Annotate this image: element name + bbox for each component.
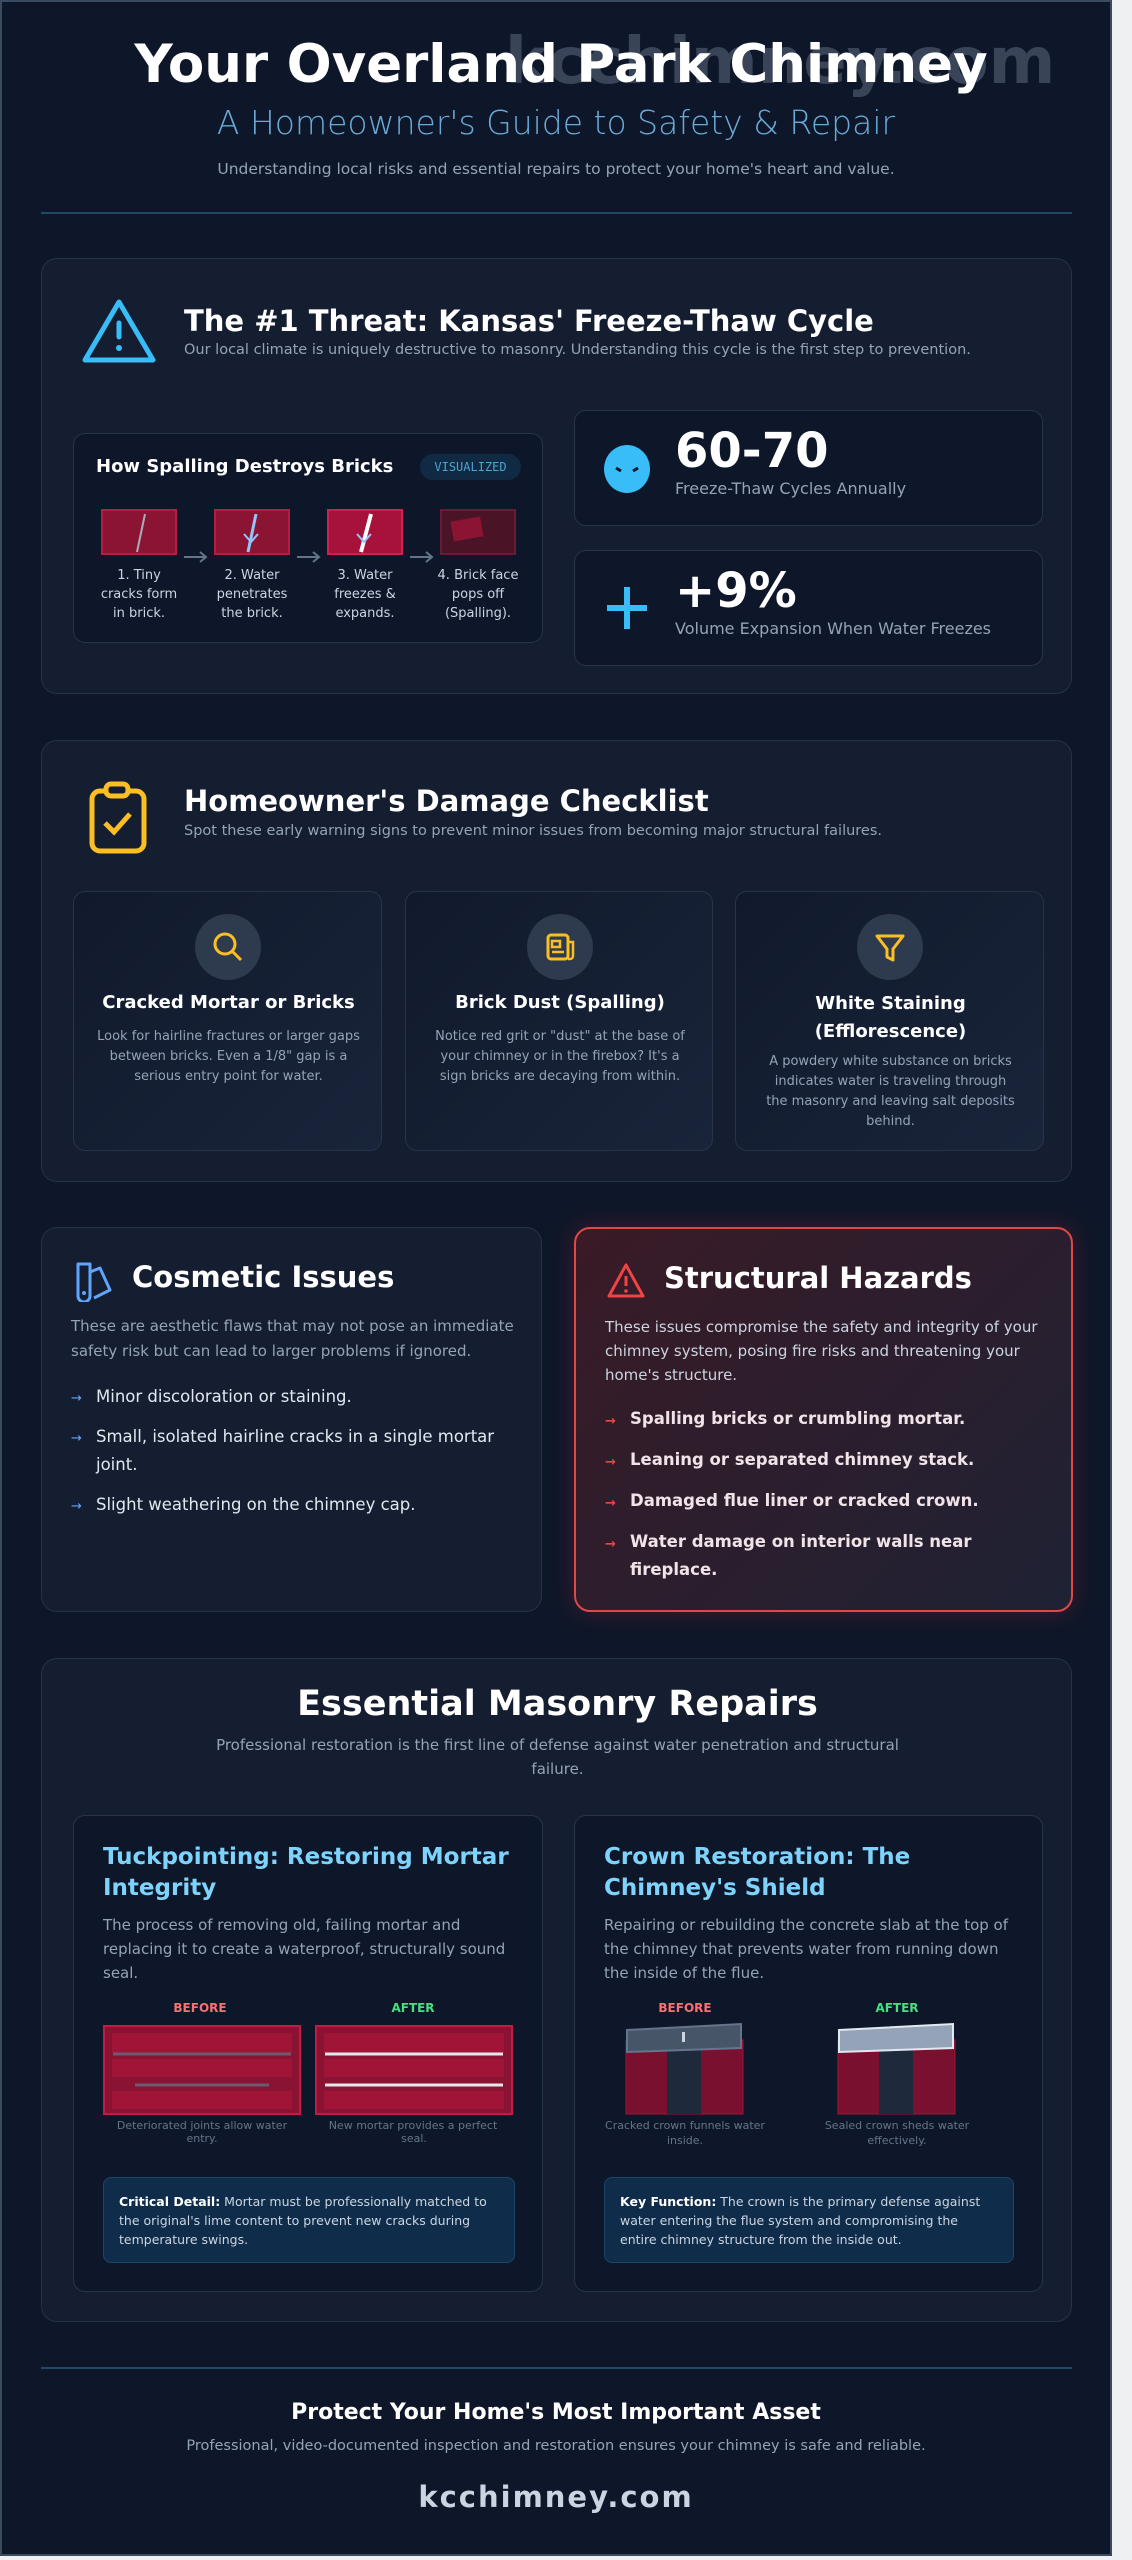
stat: expansion: +9% xyxy=(675,563,797,619)
list: → xyxy=(605,1496,616,1511)
card: crown: Repairing or rebuilding the concrete slab at the top of the chimney that prevents water from running down the inside of the flue. xyxy=(604,1916,1008,1982)
stat: cycles: 60-70 xyxy=(675,423,829,479)
list: Spalling bricks or crumbling mortar. xyxy=(630,1409,965,1428)
heading: The #1 Threat: Kansas' Freeze-Thaw Cycle xyxy=(184,304,874,338)
bricks diagram: penetrates xyxy=(217,587,288,602)
panel: essential repairs xyxy=(41,1658,1072,2322)
list: → xyxy=(71,1499,82,1514)
list: → xyxy=(605,1414,616,1429)
card: brick dust: Brick Dust (Spalling) xyxy=(455,992,665,1013)
icon: paint xyxy=(76,1262,112,1302)
card: tuckpointing: entry. xyxy=(186,2132,218,2145)
title: Your Overland Park Chimney xyxy=(134,34,988,95)
heading: Homeowner's Damage Checklist xyxy=(184,784,709,818)
badge xyxy=(420,454,521,480)
list: Slight weathering on the chimney cap. xyxy=(96,1495,416,1514)
subtitle: A Homeowner's Guide to Safety & Repair xyxy=(217,103,895,142)
panel: cosmetic issues: These are aesthetic flaws that may not pose an immediate safety risk but can lead to larger problems if ignored. xyxy=(71,1317,514,1360)
bricks diagram: (Spalling). xyxy=(445,606,511,621)
bricks diagram xyxy=(101,509,518,621)
before/after brick diagram: BEFORE xyxy=(173,2001,227,2015)
crown diagram: Cracked crown funnels water xyxy=(605,2119,765,2132)
panel: essential repairs: Essential Masonry Repairs xyxy=(297,1684,818,1724)
stat: expansion: Volume Expansion When Water Freezes xyxy=(675,619,991,638)
list: Small, isolated hairline cracks in a single mortar joint. xyxy=(96,1427,494,1474)
badge: VISUALIZED xyxy=(434,460,507,474)
list xyxy=(71,1387,494,1514)
bricks diagram: 2. Water xyxy=(225,568,280,583)
spalling card: How Spalling Destroys Bricks xyxy=(96,456,393,477)
crown diagram xyxy=(605,2001,970,2146)
crown diagram: AFTER xyxy=(875,2001,919,2015)
watermark: kcchimney.com xyxy=(505,25,1055,99)
card: crown: Crown Restoration: The Chimney's Shield xyxy=(604,1844,910,1901)
card: efflorescence: (Efflorescence) xyxy=(815,1021,966,1042)
callout: Critical Detail: Mortar must be professionally matched to the original's lime content to prevent new cracks during temperature swings. xyxy=(119,2194,487,2247)
bricks diagram: expands. xyxy=(335,606,395,621)
card: tuckpointing xyxy=(73,1815,543,2292)
list: Damaged flue liner or cracked crown. xyxy=(630,1491,979,1510)
list: → xyxy=(71,1391,82,1406)
panel: structural hazards xyxy=(574,1227,1073,1612)
callout xyxy=(604,2177,1014,2263)
list xyxy=(605,1409,979,1579)
before/after brick diagram xyxy=(103,2001,513,2132)
callout: Key Function: The crown is the primary defense against water entering the flue system and compromising the entire chimney structure from the inside out. xyxy=(620,2194,980,2247)
panel: essential repairs: Professional restoration is the first line of defense against water penetration and structural failure. xyxy=(216,1736,899,1778)
card: crown xyxy=(574,1815,1043,2292)
list: Water damage on interior walls near fireplace. xyxy=(630,1532,972,1579)
card: brick dust: Notice red grit or "dust" at the base of your chimney or in the firebox? It's a sign bricks are decaying from within. xyxy=(435,1029,685,1084)
panel: checklist xyxy=(41,740,1072,1182)
callout xyxy=(103,2177,515,2263)
list: → xyxy=(605,1455,616,1470)
crown diagram: Sealed crown sheds water xyxy=(825,2119,970,2132)
footer xyxy=(186,2400,926,2514)
panel: cosmetic issues xyxy=(41,1227,542,1612)
card: efflorescence: White Staining xyxy=(815,993,966,1014)
list: → xyxy=(71,1431,82,1446)
footer: Professional, video-documented inspection and restoration ensures your chimney is safe and reliable. xyxy=(186,2438,926,2454)
bricks diagram: cracks form xyxy=(101,587,177,602)
bricks diagram: pops off xyxy=(452,587,505,602)
tagline: Understanding local risks and essential repairs to protect your home's heart and value. xyxy=(217,160,895,178)
icon: plus xyxy=(607,587,647,629)
before/after brick diagram: AFTER xyxy=(391,2001,435,2015)
card: cracked mortar: Cracked Mortar or Bricks xyxy=(102,992,355,1013)
bricks diagram: in brick. xyxy=(113,606,165,621)
list: → xyxy=(605,1537,616,1552)
card: tuckpointing: seal. xyxy=(401,2132,427,2145)
panel: cosmetic issues: Cosmetic Issues xyxy=(132,1260,394,1294)
bricks diagram: freezes & xyxy=(334,587,396,602)
before/after brick diagram: New mortar provides a perfect xyxy=(329,2119,498,2132)
list: Leaning or separated chimney stack. xyxy=(630,1450,974,1469)
bricks diagram: the brick. xyxy=(221,606,283,621)
header xyxy=(134,25,1055,178)
spalling card xyxy=(73,433,543,643)
crown diagram: BEFORE xyxy=(658,2001,712,2015)
card: efflorescence: A powdery white substance on bricks indicates water is traveling through the masonry and leaving salt deposits behind. xyxy=(766,1054,1015,1129)
card: cracked mortar xyxy=(73,891,382,1151)
icon: warning triangle xyxy=(82,300,156,362)
panel: structural hazards: Structural Hazards xyxy=(664,1261,972,1295)
icon: snow face xyxy=(604,445,650,493)
footer: Protect Your Home's Most Important Asset xyxy=(291,2400,821,2425)
bricks diagram: 3. Water xyxy=(338,568,393,583)
list: Minor discoloration or staining. xyxy=(96,1387,352,1406)
panel: structural hazards: These issues compromise the safety and integrity of your chimney system, posing fire risks and threatening your home's structure. xyxy=(605,1318,1038,1384)
bricks diagram: 1. Tiny xyxy=(117,568,161,583)
stat: cycles: Freeze-Thaw Cycles Annually xyxy=(675,479,906,498)
card: brick dust xyxy=(405,891,713,1151)
card: efflorescence xyxy=(735,891,1044,1151)
bricks diagram: 4. Brick face xyxy=(438,568,518,583)
footer: kcchimney.com xyxy=(418,2480,694,2514)
panel: checklist: Spot these early warning signs to prevent minor issues from becoming major structural failures. xyxy=(184,823,882,839)
icon: clipboard xyxy=(90,782,146,854)
stat: cycles xyxy=(574,410,1043,526)
panel: freeze-thaw xyxy=(41,258,1072,694)
card: tuckpointing: The process of removing old, failing mortar and replacing it to create a waterproof, structurally sound seal. xyxy=(103,1916,505,1982)
subheading: Our local climate is uniquely destructive to masonry. Understanding this cycle is the first step to prevention. xyxy=(184,342,971,358)
card: cracked mortar: Look for hairline fractures or larger gaps between bricks. Even a 1/8" gap is a serious entry point for water. xyxy=(97,1029,360,1084)
card: tuckpointing: Tuckpointing: Restoring Mortar Integrity xyxy=(103,1844,509,1901)
before/after brick diagram: Deteriorated joints allow water xyxy=(117,2119,288,2132)
icon: warning xyxy=(608,1263,645,1298)
stat: expansion xyxy=(574,550,1043,666)
